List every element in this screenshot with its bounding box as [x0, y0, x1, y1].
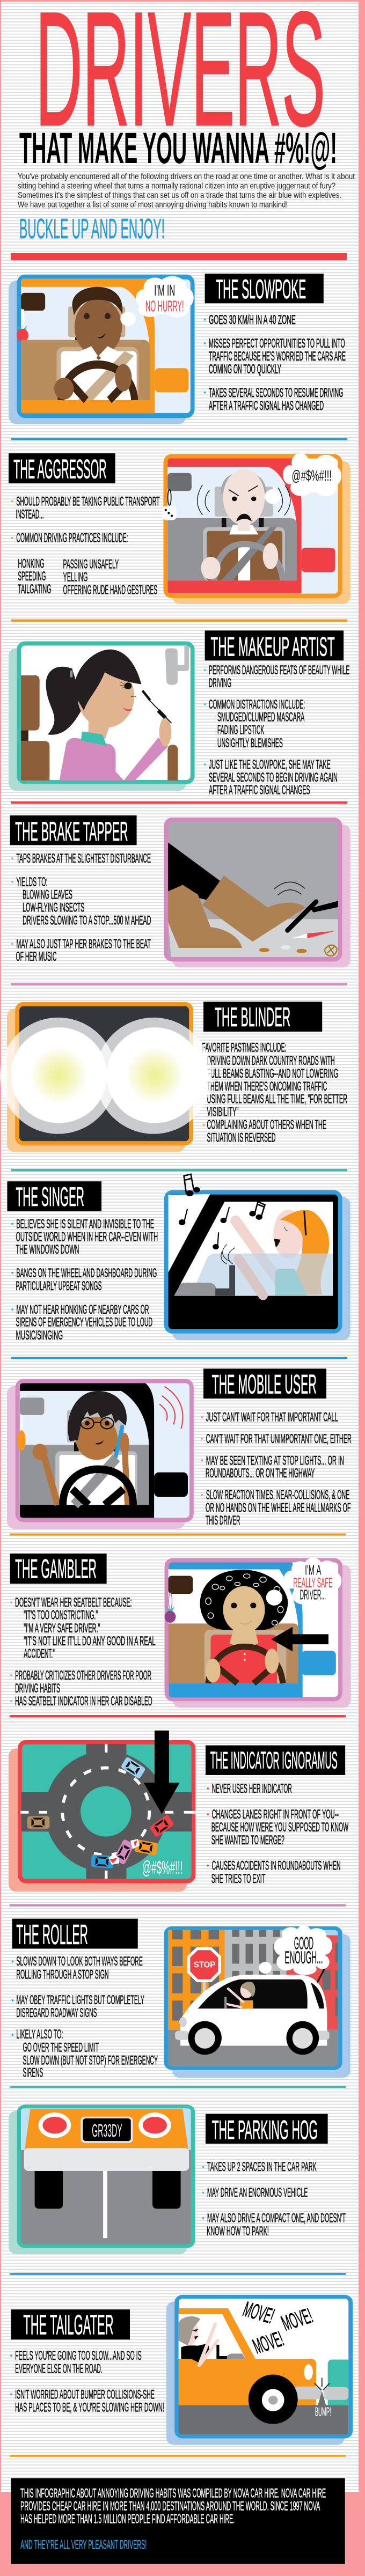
- bullet list: ACCIDENT.": [24, 1646, 55, 1661]
- panel: the brake tapper: TAPS BRAKES AT THE SLIGHTEST DISTURBANCE: [16, 851, 151, 866]
- bullet list: SITUATION IS REVERSED: [207, 1130, 275, 1145]
- bullet list: MUSIC/SINGING: [16, 1328, 63, 1343]
- intro text: [18, 172, 355, 209]
- thought bubble: GOOD: [294, 1934, 313, 1953]
- header block: BUCKLE UP AND ENJOY!: [19, 214, 165, 245]
- bullet list: DRIVING: [209, 675, 231, 690]
- speech cloud: [265, 453, 341, 504]
- illustration: tailgating car: BUMP!: [315, 2405, 331, 2419]
- panel: the indicator ignoramus: [9, 1731, 348, 1891]
- illustration: roundabout: @#$%#!!!: [142, 1858, 182, 1878]
- panel: the roller: [12, 1919, 351, 2080]
- illustration: car straddling parking line: [9, 2107, 193, 2254]
- bullet list: [202, 2160, 346, 2238]
- panel: the aggressor: OFFERING RUDE HAND GESTURES: [63, 583, 157, 598]
- heading: [11, 2309, 130, 2341]
- panel: the tailgater: THE TAILGATER: [23, 2309, 114, 2341]
- bullet list: YELLING: [63, 570, 87, 585]
- heading: THE ROLLER: [16, 1919, 88, 1950]
- heading: [10, 1554, 107, 1584]
- bullet list: LOW-FLYING INSECTS: [23, 900, 84, 915]
- bullet list: [10, 2349, 164, 2415]
- panel: the tailgater: FEELS YOU'RE GOING TOO SLOW...AND SO IS: [15, 2349, 142, 2363]
- illustration: tailgating car: [166, 2297, 351, 2445]
- bullet list: KNOW HOW TO PARK!: [207, 2224, 269, 2238]
- illustration: tailgating car: MOVE!: [278, 2303, 316, 2336]
- panel: the brake tapper: THE BRAKE TAPPER: [15, 816, 128, 847]
- panel: the singer: MAY NOT HEAR HONKING OF NEARBY CARS OR: [16, 1302, 149, 1317]
- thought bubble: [259, 1926, 332, 1975]
- bullet list: [204, 663, 349, 798]
- thought bubble: I'M IN: [154, 282, 175, 299]
- bullet list: [204, 312, 346, 413]
- arrow: [144, 1731, 180, 1814]
- bullet list: DISREGARD ROADWAY SIGNS: [16, 2006, 97, 2020]
- panel: the singer: [7, 1174, 351, 1343]
- bullet list: GOES 30 KM/H IN A 40 ZONE: [209, 312, 296, 327]
- intro text: We have put together a list of some of most annoying driving habits known to mankind!: [18, 201, 288, 209]
- footer: AND THEY'RE ALL VERY PLEASANT DRIVERS!: [20, 2538, 147, 2552]
- heading: [10, 815, 137, 847]
- licence plate: [81, 2117, 133, 2143]
- bullet list: COMMON DRIVING PRACTICES INCLUDE:: [16, 531, 128, 546]
- bullet list: LIKELY ALSO TO:: [16, 2028, 63, 2042]
- bullet list: INSTEAD...: [16, 507, 44, 522]
- bullet list: "I'M A VERY SAFE DRIVER.": [24, 1621, 100, 1636]
- illustration: singing driver: [166, 1174, 351, 1340]
- illustration: slowpoke driver: [9, 276, 194, 424]
- bullet list: [11, 494, 159, 598]
- bullet list: [201, 1410, 352, 1528]
- panel: the brake tapper: [10, 815, 351, 968]
- bullet list: [10, 1595, 156, 1709]
- heading: [9, 453, 115, 484]
- panel: the gambler: "IT'S NOT LIKE IT'LL DO ANY GOOD IN A REAL: [24, 1634, 156, 1648]
- header block: [11, 0, 355, 260]
- bullet list: TAILGATING: [18, 582, 51, 597]
- illustration: foot on brake pedal: [166, 820, 351, 968]
- panel: the aggressor: [9, 453, 351, 604]
- heading: [205, 274, 324, 304]
- bullet list: [11, 1217, 158, 1343]
- music notes: [179, 1174, 265, 1249]
- panel: the tailgater: [10, 2297, 351, 2445]
- panel: the mobile user: [7, 1368, 352, 1529]
- stop sign: [187, 1947, 221, 1982]
- thought bubble: NO HURRY!: [145, 298, 184, 315]
- panel: the singer: OUTSIDE WORLD WHEN IN HER CAR--EVEN WITH: [16, 1230, 158, 1244]
- car: [175, 1968, 330, 2055]
- panel: the slowpoke: [9, 274, 346, 424]
- speech cloud: @#$%#!!!: [291, 467, 332, 484]
- bullet list: OF HER MUSIC: [16, 950, 56, 964]
- panel: the blinder: [0, 1002, 347, 1152]
- licence plate: GR33DY: [92, 2121, 122, 2141]
- speech cloud: I'M A: [305, 1563, 321, 1578]
- bullet list: [12, 1954, 158, 2080]
- bullet list: DOESN'T WEAR HER SEATBELT BECAUSE:: [15, 1595, 132, 1610]
- illustration: car rolling through stop sign: [166, 1926, 351, 2078]
- illustration: angry driver: [163, 453, 351, 604]
- bullet list: YIELDS TO:: [16, 874, 47, 889]
- arrow: [271, 1627, 328, 1652]
- panel: the makeup artist: [9, 630, 349, 798]
- bullet list: THIS DRIVER: [206, 1513, 240, 1528]
- illustration: woman applying mascara: [9, 644, 193, 791]
- bullet list: PASSING UNSAFELY: [63, 557, 119, 571]
- panel: the gambler: HAS SEATBELT INDICATOR IN HER CAR DISABLED: [15, 1694, 152, 1709]
- illustration: roundabout: [9, 1731, 195, 1891]
- bullet list: "IT'S TOO CONSTRICTING.": [24, 1608, 98, 1623]
- bullet list: COMING ON TOO QUICKLY: [209, 361, 281, 376]
- about text: [20, 2486, 326, 2526]
- panel: the brake tapper: DRIVERS SLOWING TO A STOP...500 M AHEAD: [23, 913, 151, 928]
- shouted words: MOVE!: [250, 2327, 287, 2359]
- panel: the roller: MAY OBEY TRAFFIC LIGHTS BUT COMPLETELY: [16, 1993, 144, 2007]
- stop sign: STOP: [194, 1960, 215, 1969]
- bullet list: VISIBILITY": [207, 1105, 239, 1119]
- panel: the singer: BANGS ON THE WHEEL AND DASHBOARD DURING: [16, 1265, 157, 1280]
- speech cloud: DRIVER...: [300, 1587, 326, 1603]
- heading: THE SINGER: [16, 1181, 84, 1212]
- footer: [11, 2478, 345, 2564]
- speech cloud: [266, 1558, 341, 1606]
- panel: the aggressor: SHOULD PROBABLY BE TAKING PUBLIC TRANSPORT: [16, 494, 159, 509]
- heading: [7, 1181, 101, 1212]
- bullet list: BLOWING LEAVES: [23, 887, 72, 902]
- illustration: headlights: [0, 1004, 212, 1152]
- shouted words: [240, 2297, 316, 2359]
- panel: the gambler: [10, 1554, 351, 1709]
- cars: [27, 1756, 174, 1868]
- panel: the roller: SLOW DOWN (BUT NOT STOP) FOR EMERGENCY: [23, 2054, 158, 2067]
- illustration: driver without seatbelt: [165, 1558, 351, 1707]
- illustration: driver on phone: [7, 1381, 192, 1529]
- bullet list: SPEEDING: [18, 569, 46, 584]
- bullet list: GO OVER THE SPEED LIMIT: [23, 2041, 99, 2055]
- panel: the brake tapper: MAY ALSO JUST TAP HER BRAKES TO THE BEAT: [16, 937, 151, 951]
- bullet list: [11, 851, 151, 964]
- bullet list: SIRENS: [23, 2066, 43, 2080]
- bullet list: ROLLING THROUGH A STOP SIGN: [16, 1968, 109, 1982]
- panel: the singer: BELIEVES SHE IS SILENT AND INVISIBLE TO THE: [16, 1217, 154, 1231]
- shouted words: MOVE!: [240, 2297, 278, 2329]
- panel: the gambler: THE GAMBLER: [15, 1554, 97, 1584]
- bullet list: THE WINDOWS DOWN: [16, 1242, 79, 1257]
- bullet list: HONKING: [18, 556, 44, 571]
- bullet list: SHE TRIES TO EXIT: [211, 1871, 265, 1886]
- bullet list: DRIVING HABITS: [15, 1681, 60, 1696]
- heading: [12, 1919, 138, 1950]
- panel: the singer: SIRENS OF EMERGENCY VEHICLES DUE TO LOUD: [16, 1315, 152, 1330]
- bullet list: EVERYONE ELSE ON THE ROAD.: [15, 2362, 103, 2376]
- panel: the aggressor: THE AGGRESSOR: [13, 454, 107, 484]
- thought bubble: [120, 276, 194, 326]
- bullet list: FADING LIPSTICK: [217, 723, 264, 738]
- dividers: [10, 438, 347, 2457]
- heading: [203, 1002, 322, 1032]
- panel: the parking hog: [9, 2107, 346, 2254]
- bullet list: [202, 1040, 347, 1145]
- panel: the gambler: PROBABLY CRITICIZES OTHER DRIVERS FOR POOR: [15, 1668, 151, 1683]
- bullet list: UNSIGHTLY BLEMISHES: [217, 736, 283, 750]
- ringing signal: [159, 1387, 183, 1429]
- panel: the roller: SLOWS DOWN TO LOOK BOTH WAYS BEFORE: [16, 1954, 143, 1969]
- panel: the tailgater: ISN'T WORRIED ABOUT BUMPER COLLISIONS-SHE: [15, 2388, 155, 2402]
- bullet list: PARTICULARLY UPBEAT SONGS: [16, 1279, 102, 1293]
- bullet list: [207, 1782, 348, 1886]
- curly hair: [200, 1570, 288, 1630]
